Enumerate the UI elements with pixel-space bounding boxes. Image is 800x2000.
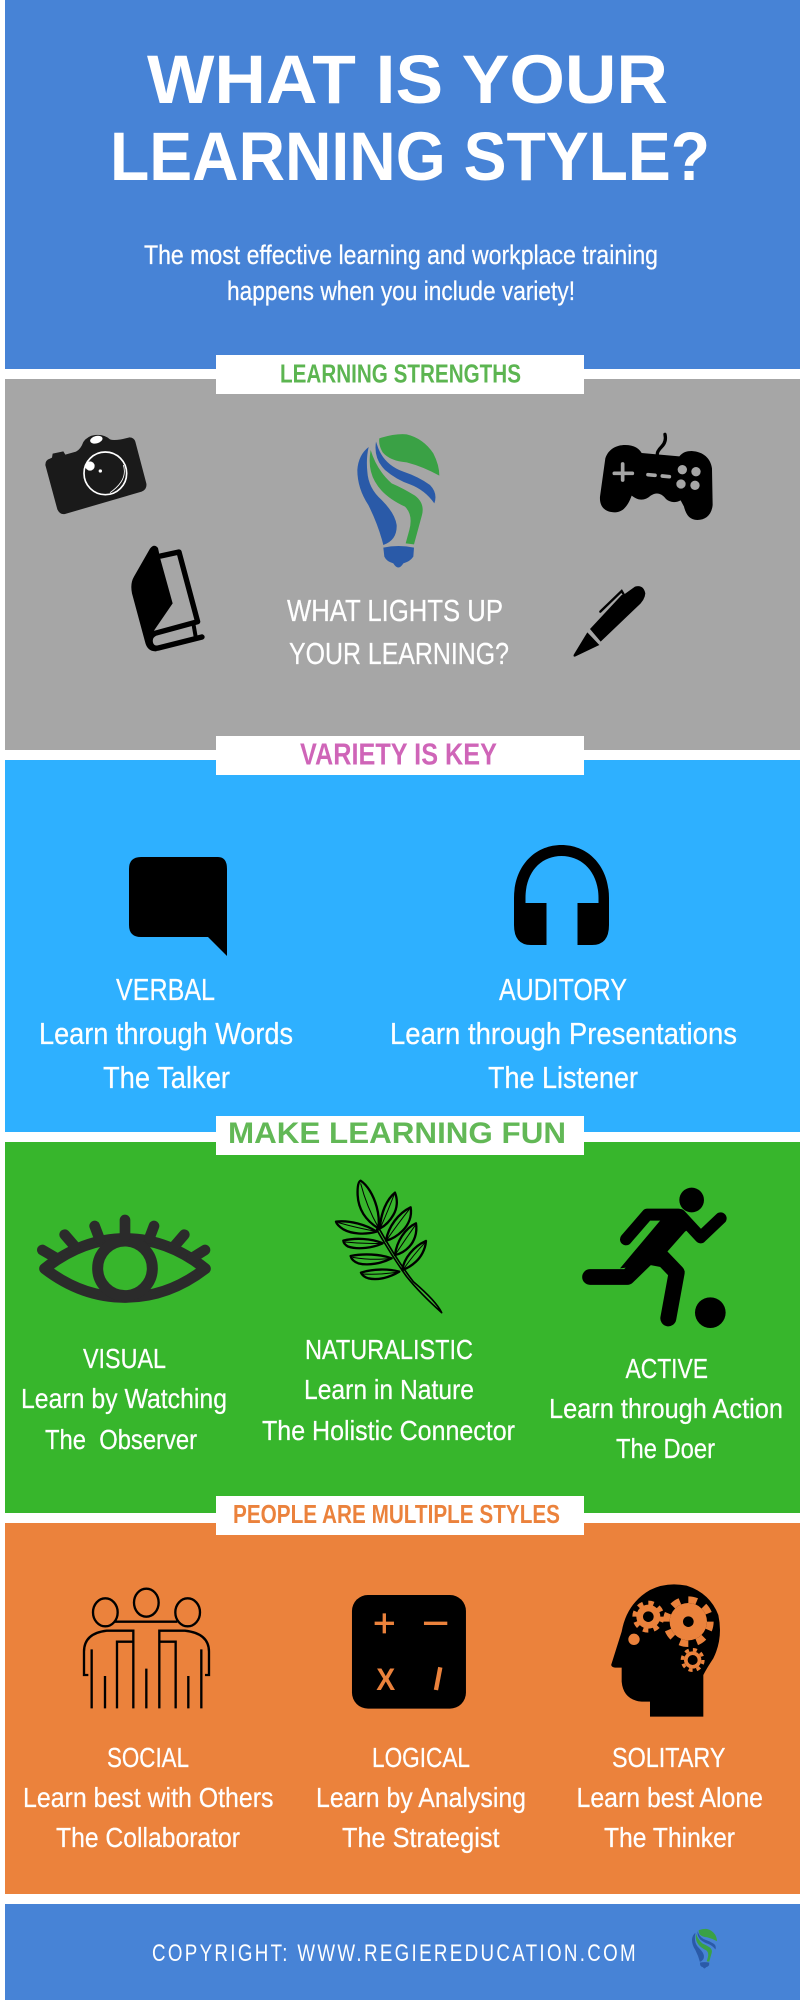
icon: pen (574, 586, 645, 657)
text: visual: The Observer (45, 1424, 197, 1455)
icon: head with gears (611, 1584, 720, 1717)
icon: game controller (600, 434, 713, 520)
panel: variety (5, 760, 800, 1132)
title (110, 41, 710, 195)
text: verbal: Learn through Words (39, 1016, 293, 1051)
callout: what lights up: WHAT LIGHTS UP (287, 593, 503, 628)
heading: learning strengths (216, 355, 584, 394)
text: auditory: Learn through Presentations (390, 1016, 737, 1051)
heading: make learning fun: MAKE LEARNING FUN (228, 1117, 566, 1150)
text: social: Learn best with Others (23, 1782, 274, 1813)
text: active: The Doer (616, 1433, 715, 1464)
panel: header (5, 0, 800, 369)
heading: variety is key (216, 736, 584, 775)
icon: camera (45, 434, 146, 514)
title: LEARNING STYLE? (110, 118, 710, 195)
icon: book (131, 546, 202, 651)
text: active (549, 1353, 783, 1464)
text: verbal: VERBAL (116, 972, 215, 1007)
text: logical: Learn by Analysing (316, 1782, 526, 1813)
callout: what lights up: YOUR LEARNING? (289, 636, 509, 671)
text: active: ACTIVE (626, 1353, 708, 1384)
text: social: The Collaborator (56, 1822, 240, 1853)
heading: people are multiple styles (216, 1496, 584, 1535)
title: WHAT IS YOUR (147, 41, 668, 118)
text: solitary (576, 1742, 763, 1853)
text: naturalistic (262, 1334, 515, 1446)
icon: runner with ball (590, 1188, 726, 1328)
text: verbal: The Talker (103, 1060, 230, 1095)
panel: footer (5, 1904, 800, 2000)
text: auditory: AUDITORY (499, 972, 627, 1007)
subtitle: happens when you include variety! (227, 276, 575, 306)
heading: learning strengths: LEARNING STRENGTHS (280, 358, 521, 388)
text: logical: LOGICAL (372, 1742, 470, 1773)
icon: leaf branch (336, 1181, 442, 1313)
panel: fun (5, 1142, 800, 1513)
text: visual: Learn by Watching (21, 1383, 227, 1414)
icon: headphones (514, 845, 609, 945)
text: active: Learn through Action (549, 1393, 783, 1424)
icon: light bulb logo (357, 434, 439, 567)
icon: eye (42, 1220, 205, 1297)
icon: speech bubble (129, 857, 227, 956)
text: social: SOCIAL (107, 1742, 189, 1773)
text: naturalistic: NATURALISTIC (305, 1334, 473, 1365)
text: visual (21, 1343, 227, 1455)
text: auditory: The Listener (488, 1060, 638, 1095)
subtitle: The most effective learning and workplace training (144, 240, 658, 270)
panel: learning strengths (5, 379, 800, 750)
callout: what lights up (287, 593, 509, 671)
heading: people are multiple styles: PEOPLE ARE MULTIPLE STYLES (233, 1499, 560, 1529)
text: solitary: SOLITARY (612, 1742, 726, 1773)
heading: variety is key: VARIETY IS KEY (300, 736, 497, 772)
icon: calculator keys (352, 1595, 466, 1709)
text: solitary: Learn best Alone (576, 1782, 763, 1813)
icon: people group (84, 1589, 209, 1708)
text: logical: The Strategist (342, 1822, 500, 1853)
text: visual: VISUAL (83, 1343, 166, 1374)
text: social (23, 1742, 274, 1853)
text: verbal (39, 972, 293, 1095)
text: naturalistic: The Holistic Connector (262, 1415, 515, 1446)
icon: calculator keys: X (376, 1661, 395, 1697)
copyright text: COPYRIGHT: WWW.REGIEREDUCATION.COM (152, 1940, 638, 1967)
subtitle (144, 240, 658, 306)
text: auditory (390, 972, 737, 1095)
text: logical (316, 1742, 526, 1853)
panel: multiple styles (5, 1523, 800, 1894)
text: naturalistic: Learn in Nature (304, 1374, 474, 1405)
text: solitary: The Thinker (604, 1822, 735, 1853)
icon: small bulb logo (692, 1929, 717, 1969)
